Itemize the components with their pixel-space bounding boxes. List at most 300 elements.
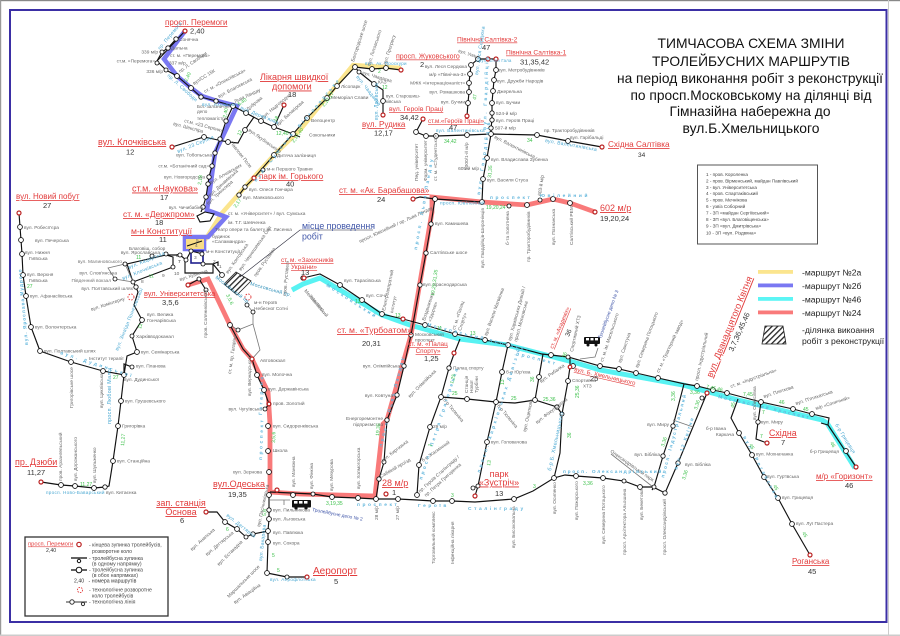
label: Turboatom: ст. м. «Турбоатом» — [337, 325, 412, 335]
stop name labels: Дитяча залізниця — [277, 153, 316, 159]
route 24 red — [188, 197, 595, 496]
street names in blue: проспект — [516, 352, 558, 367]
stop name labels: Електроапаратний — [380, 269, 396, 311]
route numbers in green: 3,36 — [693, 399, 702, 411]
stop name labels: 4 — [195, 243, 198, 249]
stop name labels: Павлове Поле — [228, 141, 253, 170]
route numbers in green: 13 — [486, 460, 493, 466]
stop name labels: вул. Луї Пастера — [796, 521, 833, 527]
stop name labels: ст. м. «Тракторний завод» — [654, 318, 685, 374]
stop name labels: вул. Балакірєва — [275, 99, 306, 127]
street names in blue: вул. Сумська — [253, 130, 296, 183]
stop name labels: тепломагістр — [197, 116, 225, 121]
label: Rudyka: вул. Рудика — [362, 120, 406, 129]
icon: trolleybus at depot 3 — [584, 337, 600, 346]
street names in blue: вул. 23 Серпня — [177, 135, 215, 155]
route numbers in green: 36 — [530, 376, 536, 382]
label: park Gorkoho: парк ім. Горького — [259, 172, 324, 181]
route numbers in green: 13 — [355, 299, 361, 305]
street names in blue: Ювілейний — [540, 192, 590, 199]
terminal labels: 45 — [808, 567, 816, 576]
numbered list of streets: 9 - ЗП «вул. Дмитрівська» — [706, 224, 762, 228]
stop name labels: м-н Конституції — [206, 249, 241, 255]
terminal labels: 7 — [781, 438, 785, 447]
street names in blue: вул. Валентинівська — [545, 138, 598, 153]
technological lines — [108, 230, 693, 505]
stop name labels: вул. Сочі — [366, 293, 386, 299]
street names in blue: вул. Роганська — [741, 435, 780, 501]
stop name labels: Меморіал Слави — [331, 95, 369, 101]
stop name labels: вул. Динамівська — [207, 168, 240, 198]
label: emergency hospital: Лікарня швидкої — [260, 72, 329, 82]
stop name labels: Гончарівська — [147, 318, 176, 324]
stop name labels: вул. Киргизька — [381, 439, 410, 464]
stop name labels: Спортивний ХТЗ — [568, 315, 583, 352]
route numbers in green: 34,42 — [444, 139, 457, 145]
stop name labels: ХТЗ — [583, 384, 592, 388]
label: Osnova: зап. станція — [156, 498, 206, 508]
stop name labels: вул. Ковтуна — [365, 393, 393, 399]
stop name labels: Театр опери та балету ім. Лисенка — [215, 227, 292, 233]
stop name labels: вул. Холмогорська — [356, 447, 362, 489]
route numbers in green: 2,40 — [183, 71, 193, 83]
stop name labels: Мейніанівський — [302, 288, 330, 319]
stop name labels: вул. Мезурова — [329, 459, 335, 491]
stop name labels: вул. П'ятихатська — [795, 389, 834, 407]
numbered list of streets: 2 - пров. Вірменський, майдан Павлівський — [706, 177, 798, 183]
stop name labels: ст. м. ім. Масельського — [599, 312, 621, 363]
stop name labels: вул. Планова — [136, 364, 166, 370]
route numbers in green: 27 — [113, 375, 119, 381]
stop name labels: вул. Циклівська — [99, 373, 105, 408]
legend: route numbers: 2,40 - номера маршрутів — [74, 578, 137, 584]
stop name labels: вул. Олеся Гончара — [249, 187, 293, 193]
stop name labels: ст. м. «Індустріальна» — [730, 367, 778, 390]
stop name labels: вул. Полтавський шлях — [44, 348, 96, 354]
stop name labels: Південний вокзал — [72, 277, 111, 284]
terminal labels: 24 — [377, 195, 385, 204]
stop name labels: вул. Северина Потоцького — [634, 311, 660, 369]
stop name labels: просп. Олександрівський — [661, 499, 668, 555]
route numbers in green: 7 — [762, 410, 765, 416]
stop name labels: пр. Петра Григоренка — [423, 462, 463, 498]
stop name labels: б-р Жасмінний — [420, 439, 451, 464]
route numbers in green: 45 — [771, 484, 779, 492]
street names in blue: просп. Ново-Баварський — [46, 489, 105, 495]
numbered list of streets: 8 - ЗП «вул. Благовіщенська» — [706, 217, 769, 222]
street names in blue: Гагаріна — [258, 374, 265, 415]
stop name labels: 8 — [141, 279, 144, 285]
stop name labels: вул. Бібліка — [685, 462, 711, 468]
route numbers in green: 46 — [779, 400, 785, 406]
street names in blue: просп. Ювілейний — [440, 200, 485, 206]
hatched works section — [224, 272, 251, 295]
label: Heroiv Pratsi street: вул. Героїв Праці — [389, 105, 444, 113]
street names in blue: просп. Любові Малої — [107, 367, 113, 424]
stop name labels: ім. Т.Г. Шевченка — [228, 220, 266, 226]
terminal labels: 20,31 — [362, 339, 381, 348]
stop name labels: 336 м/р — [146, 69, 163, 75]
stop name labels: вул. Надгородна — [260, 92, 293, 121]
stop name labels: ст. м. пр. Гагаріна — [227, 335, 238, 374]
label: Naukova: ст.м. «Наукова» — [132, 184, 198, 194]
stop name labels: вул. Валентинівська — [493, 134, 536, 160]
label: Horyzont: м/р «Горизонт» — [816, 472, 873, 481]
stop name labels: Сонячна — [179, 37, 199, 43]
terminal labels: 3,5,6 — [162, 298, 179, 307]
stops — [18, 37, 848, 579]
stop name labels: вул. Вернадського — [247, 355, 253, 396]
title: Гімназійна набережна до — [670, 103, 831, 119]
label: Osnova: Основа — [165, 507, 197, 517]
stop name labels: вул. Новгородська — [164, 174, 205, 180]
label: park Zustrich: «Зустріч» — [479, 478, 519, 488]
stop name labels: вул. Комінтерну — [90, 296, 126, 313]
label: Dvanadtsiatoho Kvitnia: 3,7,36,45,46 — [727, 311, 752, 353]
route 2b blue — [164, 31, 237, 249]
stop name labels: просп. Ювілейний / пр. Льва Ландау — [358, 204, 434, 245]
stop name labels: м/р «Північна-3» — [429, 72, 466, 78]
stop name labels: інститут — [389, 295, 398, 313]
stop name labels: вул. Естакадна — [216, 539, 244, 567]
stop name labels: вул. Мохначанка — [756, 452, 793, 458]
stop name labels: вул. Пасічниківська — [256, 484, 271, 527]
stop name labels: ст. м. «Олексіївська» — [203, 68, 247, 95]
stop name labels: пр. Тракторобудівників — [526, 211, 532, 262]
stop name labels: вул. Волонтерська — [35, 324, 77, 330]
route numbers in green: 2,17 — [233, 198, 243, 209]
route legend: -маршрут №2а — [802, 268, 862, 278]
stop name labels: Станція — [464, 375, 470, 393]
route numbers in green: 11,27 — [120, 433, 127, 446]
street names in blue: проспект — [357, 503, 399, 508]
label: prosp. Peremohy: просп. Перемоги — [165, 18, 227, 27]
route numbers in green: 2,12,17 — [321, 91, 336, 108]
terminal labels: 47 — [449, 123, 457, 132]
stop name labels: вул. Благоєвська — [217, 77, 254, 100]
street names in blue: просп. Індустріальний — [659, 393, 688, 479]
terminal labels: 1 — [392, 488, 396, 497]
stop name labels: вул. Уиаш — [458, 48, 480, 60]
numbered list of streets: 3 - вул. Університетська — [706, 185, 757, 190]
street names in blue: б-р Грицевця — [833, 423, 856, 455]
stop name labels: Маршальське шосе — [226, 564, 262, 599]
route numbers in green: 5,6 — [262, 509, 268, 516]
street names in blue: вул. Енки Гала — [479, 58, 512, 63]
stop name labels: пров. Руставелі — [282, 261, 291, 296]
label: Palats Sportu — [408, 341, 448, 363]
stop name labels: Джерельна — [497, 89, 522, 95]
street names in blue: Московський пр. — [214, 274, 252, 306]
stop name labels: вул. Бучми — [496, 100, 520, 106]
stop name labels: ст. м. «Перемога» — [170, 53, 210, 59]
route numbers in green: 2,18 — [197, 175, 204, 185]
stop name labels: Гиївська — [29, 278, 48, 284]
stop name labels: МЖК «Інтернаціоналіст» — [410, 80, 465, 86]
stop name labels: Сабвіній проїзд — [378, 456, 412, 480]
stop name labels: б-та полотняна — [505, 211, 511, 245]
stop name labels: 507-й м/р — [495, 124, 516, 132]
depot labels: Тролейбусне депо № 2 — [312, 506, 364, 523]
work site label — [302, 221, 375, 242]
stop name labels: Бот. залізничне — [197, 104, 230, 109]
stop name labels: вул. Бекетова — [639, 489, 645, 520]
terminal labels: 11 — [159, 235, 167, 244]
stop name labels: вул. Державінська — [268, 386, 309, 392]
stop name labels: пров. Рустаківа — [253, 246, 277, 278]
street names in blue: просп. Харківських Дивізій — [475, 346, 523, 474]
stop name labels: Нової — [469, 380, 475, 393]
label: park Zustrich — [479, 469, 519, 498]
stop name labels: вул. Ярославська — [121, 250, 160, 256]
street names in blue: вул. 12 Квітня — [673, 416, 696, 471]
label: Zakhysnykiv Ukrainy: ст. м. «Захисників — [281, 256, 334, 264]
route numbers in green: 19,35 — [375, 423, 382, 436]
label: Zhukovskoho: просп. Жуковського — [396, 54, 460, 60]
route legend: робіт з реконструкції — [802, 336, 885, 346]
stop name labels: 2 — [213, 259, 216, 265]
stop name labels: вул. Кузнечна — [179, 268, 209, 282]
numbered list of streets: 5 - пров. Мечнікова — [706, 198, 747, 203]
legend: two-direction stop: (в обох напрямках) — [92, 573, 138, 579]
stop name labels: вул. Бисоковольна — [511, 506, 517, 548]
stop name labels: Льва Ландау — [233, 87, 262, 105]
stop name labels: ст.м. «Перемога» — [117, 58, 155, 64]
terminal labels: 40 — [286, 180, 294, 188]
route numbers in green: 47 — [472, 94, 479, 100]
stop name labels: вул. Гвардійців-Широнінців — [479, 208, 486, 268]
terminal labels: 34,42 — [400, 113, 419, 122]
stop name labels: Салтівське шосе — [430, 250, 468, 256]
street names in blue: Сталінграду — [468, 506, 526, 512]
stop name labels: вул. Робесп'єра — [24, 225, 59, 231]
stop name labels: вул. Китаєнка — [106, 490, 137, 496]
stop name labels: депо — [197, 109, 208, 114]
terminal labels: 5 — [334, 577, 338, 586]
stop name labels: Велоцентр — [311, 118, 335, 124]
label: Osnova: 6 — [180, 516, 184, 525]
legend: one-direction stop: (в одному напрямку) — [92, 562, 142, 568]
street names in blue: вул. Ак. Проскури — [365, 61, 407, 66]
numbered list of streets — [698, 165, 818, 244]
stop name labels: вул. Свистуна — [617, 332, 633, 364]
route numbers in green: 11 — [137, 323, 144, 330]
stop name labels: ст.м. «23 Серпня» — [183, 118, 224, 134]
stop name labels: вул. Зернова — [233, 470, 262, 476]
stop name labels: 27 м/р — [395, 506, 401, 520]
route legend: -маршрут №2б — [802, 281, 862, 291]
stop name labels: вул. Верхня — [27, 272, 54, 278]
label: Palats Sportu: 1,25 — [424, 354, 439, 363]
label: 28 m/r: 28 м/р — [382, 478, 408, 488]
stop name labels: Небесної Сотні — [254, 306, 288, 312]
numbered list of streets: 10 - ЗП «вул. Різдвяна» — [706, 230, 757, 235]
stop name labels: 10 — [174, 271, 180, 277]
route numbers in green: 12 — [382, 85, 388, 91]
street names in blue: вул. Чаадаєва — [354, 75, 382, 107]
stop name labels: пров. Соляниківський — [202, 290, 209, 338]
label: Osnova — [156, 498, 206, 525]
stop name labels: ст. м. «Палац — [451, 300, 466, 331]
stop name labels: Белгородське шосе — [350, 19, 369, 63]
stop name labels: вул. Семінарська — [141, 350, 180, 356]
stop name labels: вул. Слов'янська — [79, 270, 117, 276]
label: Novyi pobut: вул. Новий побут — [16, 192, 80, 201]
stop name labels: вул. Дружби Народів — [497, 78, 544, 84]
stop name labels: ст. м. «Університет» / вул. Сумська — [228, 211, 306, 217]
route 2a yellow — [205, 65, 401, 240]
route numbers in green: 27 — [27, 284, 33, 290]
route numbers in green: 31,35 — [487, 165, 494, 178]
route numbers in green: 6,40 — [237, 97, 248, 108]
label: Barabashova: ст. м. «Ак. Барабашова» — [339, 186, 430, 195]
stop name labels: вул. Шекспіра — [172, 121, 204, 135]
stop name labels: вул. Льговська — [273, 516, 306, 522]
stop name labels: вул. Ромашкова — [429, 90, 465, 96]
street names in blue: Московський пр. — [249, 280, 293, 299]
legend: technological line: - технологічна лінія — [89, 600, 136, 606]
route numbers in green: 25 — [511, 396, 517, 402]
stop name labels: Благовіщ. собор — [129, 246, 166, 252]
stop name labels: Торговельний комплекс — [430, 511, 437, 564]
terminal labels: 2,40 — [190, 26, 205, 36]
street names in blue: пр. Л. Свободи — [166, 73, 198, 103]
stop name labels: Григорівка — [122, 424, 145, 430]
label: park Zustrich: 13 — [495, 489, 503, 498]
street names in blue: просп. Петра Григоренка — [418, 366, 461, 481]
stop name labels: вул. Маяковського — [243, 195, 284, 201]
stop name labels: КАЗ — [378, 80, 387, 84]
stop name labels: пр. Л. Свободи — [178, 51, 209, 75]
legend: technological turning circle: коло тролейбусів — [92, 592, 133, 600]
label: Skhidna: Східна — [769, 428, 797, 438]
technological turning circles — [128, 294, 251, 300]
stop name labels: Московський — [415, 331, 444, 338]
stop name labels: вул. Афанасіївська — [30, 294, 73, 300]
terminal labels: 2 — [420, 60, 424, 69]
route numbers in green: 13 — [500, 379, 506, 385]
stop name labels: вул. Сидоренківська — [273, 424, 319, 430]
title: на період виконання робіт з реконструкції — [617, 70, 883, 86]
stop name labels: 28 м/р — [374, 506, 380, 520]
stop name labels: вул. Василя Стуса — [487, 178, 528, 184]
label: Zakhysnykiv Ukrainy: 13 — [301, 268, 309, 277]
street names in blue: Московський — [325, 282, 379, 320]
stop name labels: Григорівське шосе — [69, 367, 75, 408]
route numbers in green: 3,36 — [681, 469, 690, 481]
street names in blue: просп. Льва Ландау — [378, 354, 407, 447]
stop name labels: вул. Героїв Праці — [496, 118, 534, 124]
stop name labels: вул. Печерська — [35, 238, 69, 244]
stop name labels: вул. Метробудівників — [498, 68, 545, 74]
stop name labels: 603-й м/р — [536, 174, 546, 196]
label: emergency hospital: 18 — [288, 90, 296, 99]
street names in blue: пр. Перемоги — [157, 21, 184, 51]
street names in blue: просп. Льва Ландау — [413, 156, 435, 250]
label: B. Khmelnytskoho: 25 — [590, 374, 598, 383]
stop name labels: просп. Архітектора Альошина — [622, 488, 628, 555]
route numbers in green: 12,40 — [276, 131, 289, 137]
stop name labels: б-р Івана — [706, 426, 726, 432]
label: Akademika 36: ст. м. «Академік» — [549, 306, 571, 350]
numbered list of streets: 1 - пров. Короленка — [706, 172, 748, 177]
stop name labels: вул. Владислава Зубенка — [491, 157, 548, 163]
route legend: -маршрут №24 — [802, 308, 862, 318]
stop name labels: Харківводоканал — [136, 334, 174, 340]
route numbers in green: 6 — [226, 527, 229, 533]
legend: one-direction stop: - тролейбусна зупинка — [89, 555, 143, 562]
stop name labels: 29 м/р — [433, 424, 447, 430]
stop name labels: вул. Тарасівська — [344, 278, 381, 284]
trolleybus network lines — [19, 31, 856, 577]
stop name labels: Доброва — [245, 95, 264, 113]
stop name labels: вул. Сокора — [273, 540, 300, 546]
terminal labels: 11,27 — [27, 468, 45, 477]
street names in blue: б-р Б. Хмельницького — [547, 411, 565, 471]
stop name labels: Сокольники — [309, 132, 336, 138]
stop name labels: вул. Олексіївка — [752, 386, 758, 420]
street names in blue: Героїв — [418, 503, 449, 509]
stop name labels: вул. Чаадаєва — [362, 70, 393, 83]
legend: two-direction stop: - тролейбусна зупинка — [89, 566, 143, 574]
stop name labels: Спорту» — [457, 312, 469, 332]
route numbers in green: 7,45 — [743, 392, 753, 398]
stop name labels: Енергоремонтне — [346, 416, 383, 422]
route legend: -ділянка викоання — [802, 325, 875, 335]
stop name labels: вул. Леся Сердюка — [425, 64, 467, 70]
stop name labels: вул. Конторська — [225, 242, 250, 275]
route numbers in green: 45 — [803, 407, 809, 413]
route numbers in green: 36 — [561, 351, 569, 359]
label: Akademika 36: 36 — [564, 328, 574, 338]
stop name labels: 337 м/р — [169, 60, 186, 66]
route legend: -маршрут №46 — [802, 294, 862, 304]
route numbers in green: 36 — [567, 432, 573, 438]
route numbers in green: 45 — [800, 531, 808, 539]
stop name labels: вул. Плиткова — [763, 384, 795, 400]
route numbers in green: 25,36 — [575, 385, 581, 398]
stop name labels: вул. Тобольська — [176, 152, 212, 158]
stop name labels: вул. Велика — [147, 312, 174, 318]
numbered list of streets: 4 - пров. Спартаківський — [706, 190, 758, 196]
stop name labels: вул. Миру — [761, 420, 783, 426]
stop name labels: вул. Грицевця — [782, 495, 814, 501]
stop name labels: вул. Чугуївська — [228, 406, 262, 412]
stop name labels: ст. м. «Студентська» — [433, 135, 439, 181]
route numbers in green: 1 — [427, 443, 434, 448]
stop name labels: просп. Індустріальний — [693, 332, 710, 381]
route numbers in green: 7,45,46 — [706, 384, 723, 393]
numbered list of streets: 7 - ЗП «майдан Сергіївський» — [706, 210, 769, 216]
stop name labels: вул. Тринклера — [205, 179, 235, 206]
title: ТРОЛЕЙБУСНИХ МАРШРУТІВ — [652, 52, 850, 69]
street names in blue: вул. Зінаїди Понятовської — [114, 287, 145, 352]
label: Derzhprom: ст. м. «Держпром» — [123, 209, 195, 219]
work site label: місце проведення — [302, 221, 375, 231]
stop name labels: вул. Пильникова — [273, 508, 310, 514]
stop name labels: Школа — [273, 448, 288, 454]
stop name labels: м-н Першого Травня — [267, 166, 313, 172]
route numbers in green: 3,36 — [671, 391, 677, 401]
depot labels — [312, 289, 621, 523]
stop name labels: вул. Прогресу — [382, 34, 398, 66]
stop name labels: вул. Дудинської — [124, 377, 160, 383]
stop name labels: вул. Бібліка — [634, 452, 660, 458]
stop name labels: вул. Бучми — [441, 100, 465, 106]
stop name labels: б-р Тюленіна — [441, 397, 465, 424]
label: Zakhysnykiv Ukrainy — [281, 256, 334, 277]
stop name labels: вул. Гарібальді — [570, 135, 603, 141]
